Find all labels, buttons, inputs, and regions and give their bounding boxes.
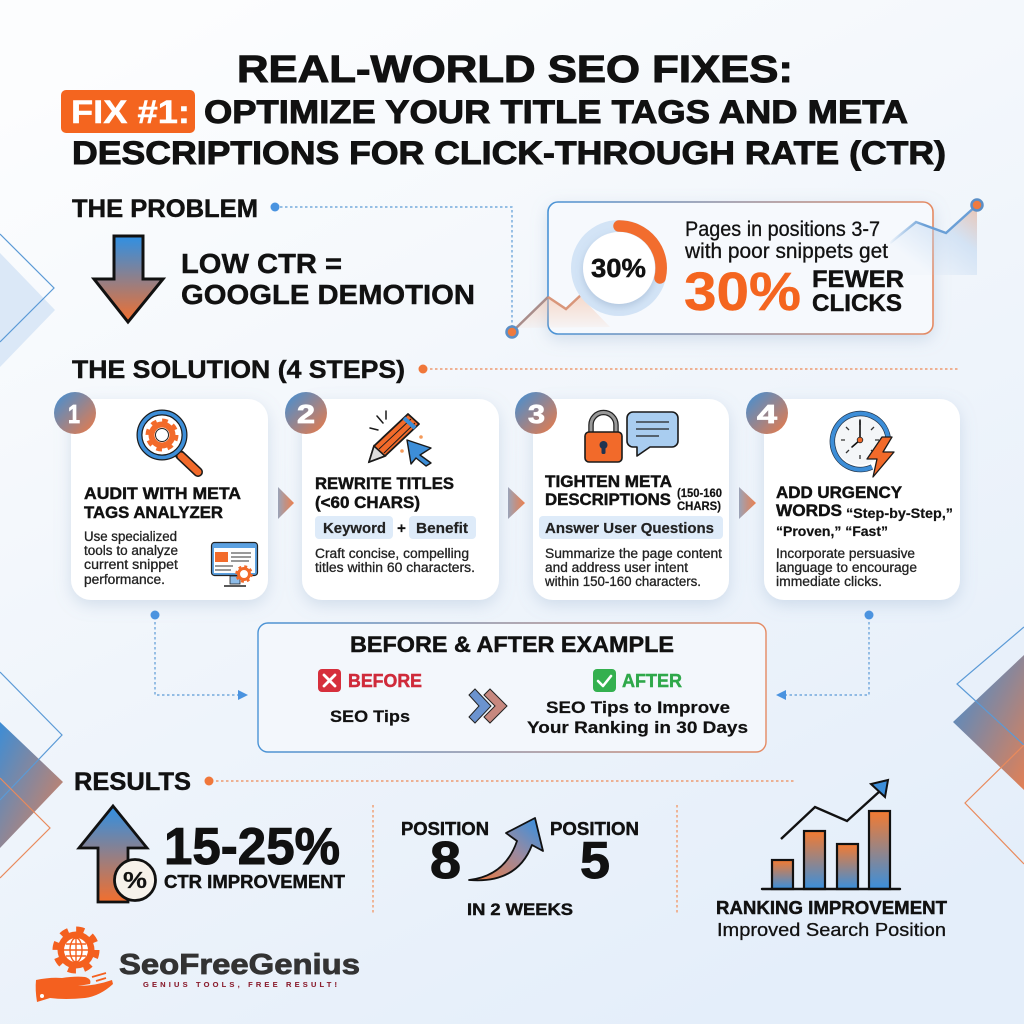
heading: results: RESULTS — [74, 768, 191, 796]
step number 3: 3 — [528, 399, 545, 429]
panel: step 3 — [515, 392, 729, 600]
step number 4 — [746, 392, 788, 434]
panel: statistic card — [548, 202, 933, 334]
decoration: left bottom diamonds — [0, 672, 63, 878]
step 4 heading: “Step-by-Step,” — [846, 505, 953, 521]
step 2 heading: (<60 CHARS) — [315, 494, 420, 512]
icon: monitor with gear — [212, 542, 258, 586]
title: OPTIMIZE YOUR TITLE TAGS AND META — [204, 94, 908, 130]
curved arrow — [469, 818, 543, 880]
result: position change: 5 — [580, 832, 610, 890]
icon: magnifier with gear — [140, 412, 198, 472]
result: position change: POSITION — [401, 819, 489, 839]
decoration: left top diamonds — [0, 234, 55, 367]
chart node: left — [506, 326, 518, 338]
problem statement: LOW CTR = — [181, 248, 342, 279]
icon: up arrow with percent: % — [123, 867, 147, 893]
before column: SEO Tips — [330, 707, 410, 726]
result: ranking caption: Improved Search Position — [717, 920, 946, 940]
after column: AFTER — [622, 671, 682, 691]
heading: the problem: THE PROBLEM — [72, 195, 258, 223]
step 4 body — [776, 546, 917, 589]
bar chart: ranking improvement — [762, 780, 900, 889]
step 1 heading: AUDIT WITH META — [84, 485, 241, 503]
stat text: with poor snippets get — [684, 240, 888, 263]
logo: SeoFreeGenius — [36, 930, 360, 1002]
chart node: right — [972, 200, 982, 210]
stat text: 30% — [684, 262, 801, 322]
step 1 heading — [84, 485, 241, 522]
step 4 heading: “Proven,” “Fast” — [776, 523, 888, 539]
decoration: right diamonds — [953, 627, 1024, 864]
donut chart: 30% — [591, 253, 646, 283]
stat text — [684, 218, 904, 322]
step 4 heading: ADD URGENCY — [776, 484, 902, 502]
step number 2: 2 — [297, 399, 315, 429]
fix badge: FIX #1: — [71, 94, 190, 130]
arrow: step 2 to 3 — [508, 487, 525, 519]
title — [61, 49, 946, 171]
plus sign: + — [397, 520, 406, 537]
step 3 heading: TIGHTEN META — [545, 473, 672, 491]
step 1 heading: TAGS ANALYZER — [84, 504, 223, 522]
connector: step 4 to example — [776, 610, 874, 700]
icon: padlock — [585, 412, 622, 462]
step 4 body: language to encourage — [776, 560, 917, 575]
step 3 body — [544, 546, 722, 589]
step 4 body: immediate clicks. — [776, 574, 882, 589]
step 3 heading: DESCRIPTIONS — [545, 491, 671, 509]
chart line across stat card, right — [890, 205, 977, 275]
step 4 heading: WORDS — [776, 502, 842, 520]
after column: Your Ranking in 30 Days — [527, 718, 748, 737]
stat text: Pages in positions 3-7 — [685, 218, 880, 241]
icon: double chevron — [469, 689, 507, 723]
result: CTR improvement: CTR IMPROVEMENT — [164, 872, 345, 892]
result: position change: POSITION — [550, 819, 639, 839]
step 3 heading: (150-160 — [677, 486, 722, 500]
icon: speech bubble — [627, 412, 678, 456]
result: position change: IN 2 WEEKS — [467, 900, 573, 919]
chip: keyword: Keyword — [323, 520, 386, 537]
chip: benefit — [409, 516, 476, 539]
step 2 heading: REWRITE TITLES — [315, 475, 454, 493]
chip: benefit: Benefit — [416, 520, 468, 537]
step 1 body: performance. — [84, 572, 165, 587]
step 4 heading — [776, 484, 953, 539]
example heading: BEFORE & AFTER EXAMPLE — [350, 632, 674, 657]
statistic content — [571, 218, 904, 322]
result: position change: 8 — [430, 832, 461, 890]
step number 1: 1 — [68, 399, 80, 429]
logo: SeoFreeGenius: SeoFreeGenius — [119, 949, 360, 981]
icon: red cross — [318, 669, 341, 692]
chip: answer user questions — [539, 516, 723, 539]
step number 3 — [515, 392, 557, 434]
arrow: step 3 to 4 — [739, 487, 756, 519]
step number 4: 4 — [757, 399, 778, 429]
fix badge — [61, 90, 195, 133]
result: CTR improvement: 15-25% — [164, 818, 340, 876]
before column — [318, 669, 422, 726]
title: DESCRIPTIONS FOR CLICK-THROUGH RATE (CTR) — [72, 135, 946, 171]
chip: answer user questions: Answer User Questions — [545, 520, 714, 537]
result: position change — [401, 818, 639, 919]
step 2 body — [315, 546, 475, 575]
after column — [527, 669, 748, 737]
arrow: step 1 to 2 — [278, 487, 294, 519]
result dividers — [373, 805, 677, 915]
connector: problem to stat — [270, 202, 512, 326]
step 2 heading — [315, 475, 454, 512]
logo: SeoFreeGenius: GENIUS TOOLS, FREE RESULT! — [143, 980, 337, 989]
icon: gear with globe — [56, 930, 96, 970]
step 3 heading: CHARS) — [677, 499, 721, 513]
icon: green check — [593, 669, 616, 692]
solution divider — [418, 364, 960, 374]
before column: BEFORE — [348, 671, 422, 691]
title: REAL-WORLD SEO FIXES: — [237, 49, 793, 91]
heading: the solution: THE SOLUTION (4 STEPS) — [72, 356, 405, 384]
step 1 body — [84, 529, 178, 587]
stat text: FEWER — [812, 266, 904, 293]
icon: pencil and cursor — [369, 411, 431, 466]
results divider — [204, 776, 796, 786]
step 3 body: and address user intent — [545, 560, 688, 575]
result: ranking caption: RANKING IMPROVEMENT — [716, 898, 947, 918]
step 3 body: within 150-160 characters. — [544, 574, 701, 589]
after column: SEO Tips to Improve — [546, 698, 730, 717]
chart line across stat card, left — [512, 294, 610, 332]
icon: up arrow with percent — [79, 806, 156, 902]
panel: step 4 — [746, 392, 960, 600]
panel: before and after example — [258, 623, 766, 752]
problem statement — [181, 248, 475, 310]
panel: step 2 — [285, 392, 499, 600]
stat text: CLICKS — [812, 290, 902, 317]
icon: clock with lightning — [832, 414, 894, 477]
step 4 body: Incorporate persuasive — [776, 546, 915, 561]
step 1 body: current snippet — [84, 557, 178, 572]
donut chart — [571, 220, 667, 316]
icon: open hand — [36, 973, 113, 1002]
result: ranking caption — [716, 898, 947, 940]
panel: step 1 — [54, 392, 268, 600]
chip: keyword — [315, 516, 393, 539]
step number 2 — [285, 392, 327, 434]
step number 1 — [54, 392, 96, 434]
icon: down arrow — [94, 236, 163, 322]
step 3 heading — [545, 473, 722, 513]
step 1 body: Use specialized — [84, 529, 177, 544]
step 2 body: Craft concise, compelling — [315, 546, 469, 561]
problem statement: GOOGLE DEMOTION — [181, 279, 475, 310]
connector: step 1 to example — [150, 610, 248, 700]
step 1 body: tools to analyze — [84, 543, 178, 558]
step 3 body: Summarize the page content — [545, 546, 722, 561]
step 2 body: titles within 60 characters. — [315, 560, 475, 575]
